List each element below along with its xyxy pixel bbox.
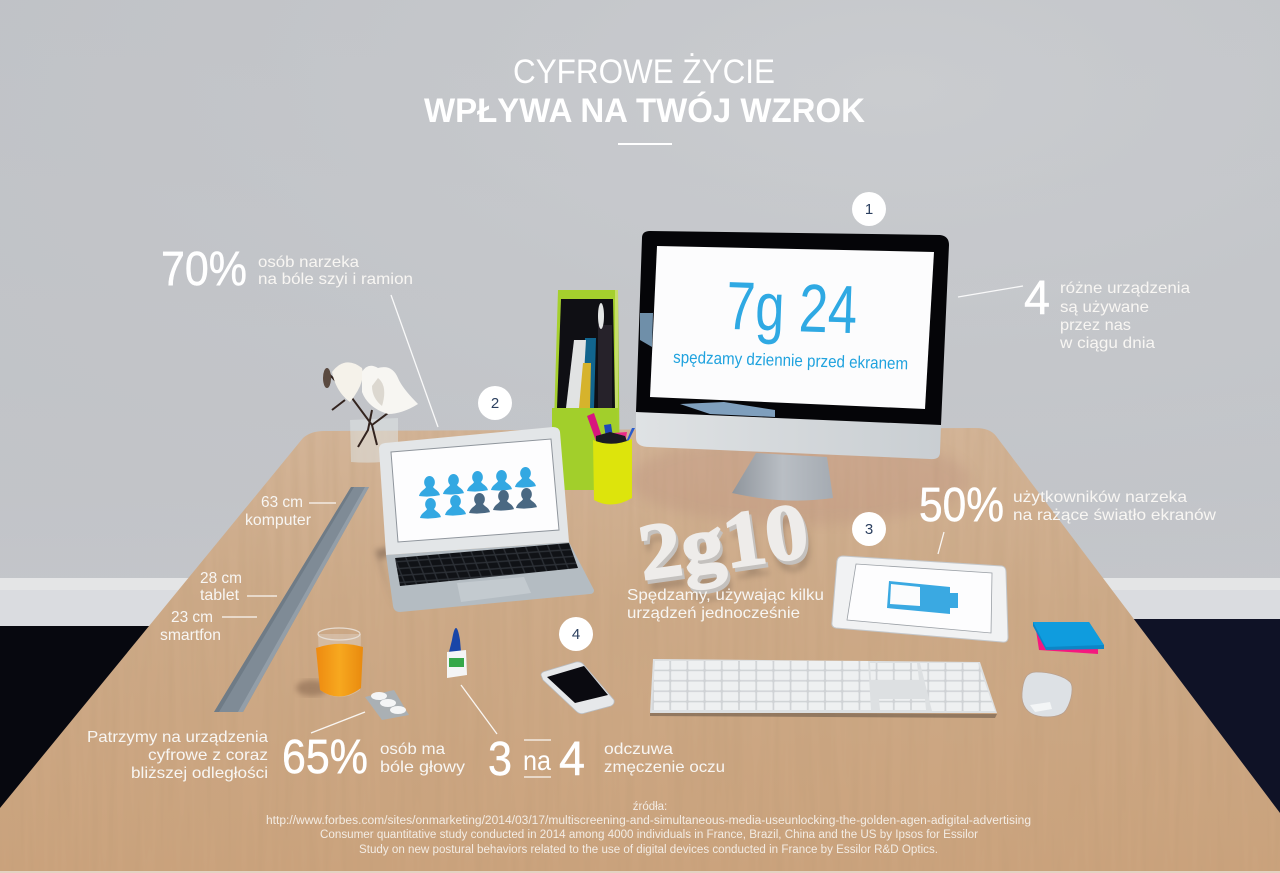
stat: 70% neck and shoulder pain: 70% [161, 243, 247, 296]
number badge 4: 4 [572, 626, 580, 643]
text: closer viewing distance [87, 729, 268, 782]
label: tablet distance: tablet [200, 587, 240, 604]
stat: 4 devices: w ciągu dnia [1059, 335, 1155, 352]
icon: tablet with battery [832, 556, 1008, 642]
sources [266, 801, 1031, 856]
label: tablet distance: 28 cm [200, 570, 242, 587]
trackpad [457, 577, 531, 602]
keyboard of laptop [395, 543, 578, 586]
text: closer viewing distance: Patrzymy na urządzenia [87, 729, 268, 746]
stat: 3 in 4 eye strain: na [523, 745, 551, 776]
screen caption: spędzamy dziennie przed ekranem [673, 348, 908, 373]
stat: 50% screen glare: 50% [919, 479, 1004, 532]
stat: 4 devices: 4 [1024, 272, 1050, 325]
number badge 1 [852, 192, 886, 226]
title [424, 53, 865, 145]
label: smartphone distance: 23 cm [171, 609, 213, 626]
stat: 50% screen glare: użytkowników narzeka [1013, 489, 1187, 506]
stat: 65% headaches [282, 712, 465, 784]
screen stat: 7g 24: 7g 24 [725, 268, 859, 348]
icon: pill blister [365, 690, 409, 720]
label: tablet distance [200, 570, 277, 604]
title: CYFROWE ŻYCIE [513, 53, 775, 91]
stat: 3 in 4 eye strain: 3 [488, 733, 512, 786]
desk [0, 428, 1280, 873]
sources: Consumer quantitative study conducted in 2014 among 4000 individuals in France, Brazil, China and the US by Ipsos for Essilor [320, 829, 978, 841]
icon: laptop [375, 427, 594, 612]
text: multi-device caption: urządzeń jednocześnie [627, 605, 800, 622]
stat: 4 devices: różne urządzenia [1060, 280, 1190, 297]
icon: white keyboard [650, 659, 997, 718]
callout: 3D stat 2g10: 2g10 [633, 487, 814, 598]
number badge 3: 3 [865, 521, 873, 538]
icon: pen cup [587, 413, 635, 505]
icon: ruler [214, 487, 369, 712]
title: WPŁYWA NA TWÓJ WZROK [424, 92, 865, 130]
label: computer distance: komputer [245, 512, 312, 529]
stat: 65% headaches: bóle głowy [380, 759, 465, 776]
text: closer viewing distance: bliższej odległości [131, 765, 268, 782]
number badge 4 [559, 617, 593, 651]
icon: desktop monitor [636, 231, 949, 501]
text: multi-device caption [627, 587, 824, 622]
label: smartphone distance [160, 609, 257, 644]
number badge 1: 1 [865, 201, 873, 218]
label: computer distance [245, 494, 336, 529]
icon: sticky notes [1033, 622, 1104, 654]
callout: 3D stat 2g10: 2g10 [636, 491, 816, 601]
stat: 3 in 4 eye strain: zmęczenie oczu [604, 759, 725, 776]
icon: mouse [1022, 672, 1072, 717]
stat: 3 in 4 eye strain [461, 685, 725, 786]
icon: eye drops [447, 628, 467, 678]
label: computer distance: 63 cm [261, 494, 303, 511]
sources: Study on new postural behaviors related to the use of digital devices conducted in France by Essilor R&D Optics. [359, 844, 938, 856]
stat: 50% screen glare [919, 479, 1216, 554]
stat: 65% headaches: 65% [282, 731, 368, 784]
sources: źródła: [633, 801, 667, 813]
stat: 4 devices: przez nas [1060, 317, 1131, 334]
label: smartphone distance: smartfon [160, 627, 221, 644]
icon: flowers in vase [323, 362, 418, 463]
stat: 70% neck and shoulder pain: osób narzeka [258, 254, 359, 271]
sources: http://www.forbes.com/sites/onmarketing/2014/03/17/multiscreening-and-simultaneous-media-useunlocking-the-golden-agen-adigital-advertising [266, 815, 1031, 827]
stat: 70% neck and shoulder pain [161, 243, 438, 427]
icon: glass of orange juice [296, 628, 363, 697]
icon: phone [541, 662, 614, 714]
callout: 3D stat 2g10: 2g10 [638, 498, 818, 609]
stat: 3 in 4 eye strain: odczuwa [604, 741, 673, 758]
stat: 70% neck and shoulder pain: na bóle szyi i ramion [258, 271, 413, 288]
stat: 50% screen glare: na rażące światło ekranów [1013, 507, 1216, 524]
stat: 4 devices [958, 272, 1190, 352]
number badge 2 [478, 386, 512, 420]
number badge 2: 2 [491, 395, 499, 412]
stat: 65% headaches: osób ma [380, 741, 445, 758]
stat: 4 devices: są używane [1060, 299, 1149, 316]
icon: green magazine holder with files [552, 290, 620, 490]
number badge 3 [852, 512, 886, 546]
stat: 3 in 4 eye strain: 4 [559, 733, 585, 786]
text: multi-device caption: Spędzamy, używając kilku [627, 587, 824, 604]
text: closer viewing distance: cyfrowe z coraz [148, 747, 268, 764]
pictogram: people, 7 of 10 affected [419, 467, 537, 519]
battery [887, 581, 958, 614]
